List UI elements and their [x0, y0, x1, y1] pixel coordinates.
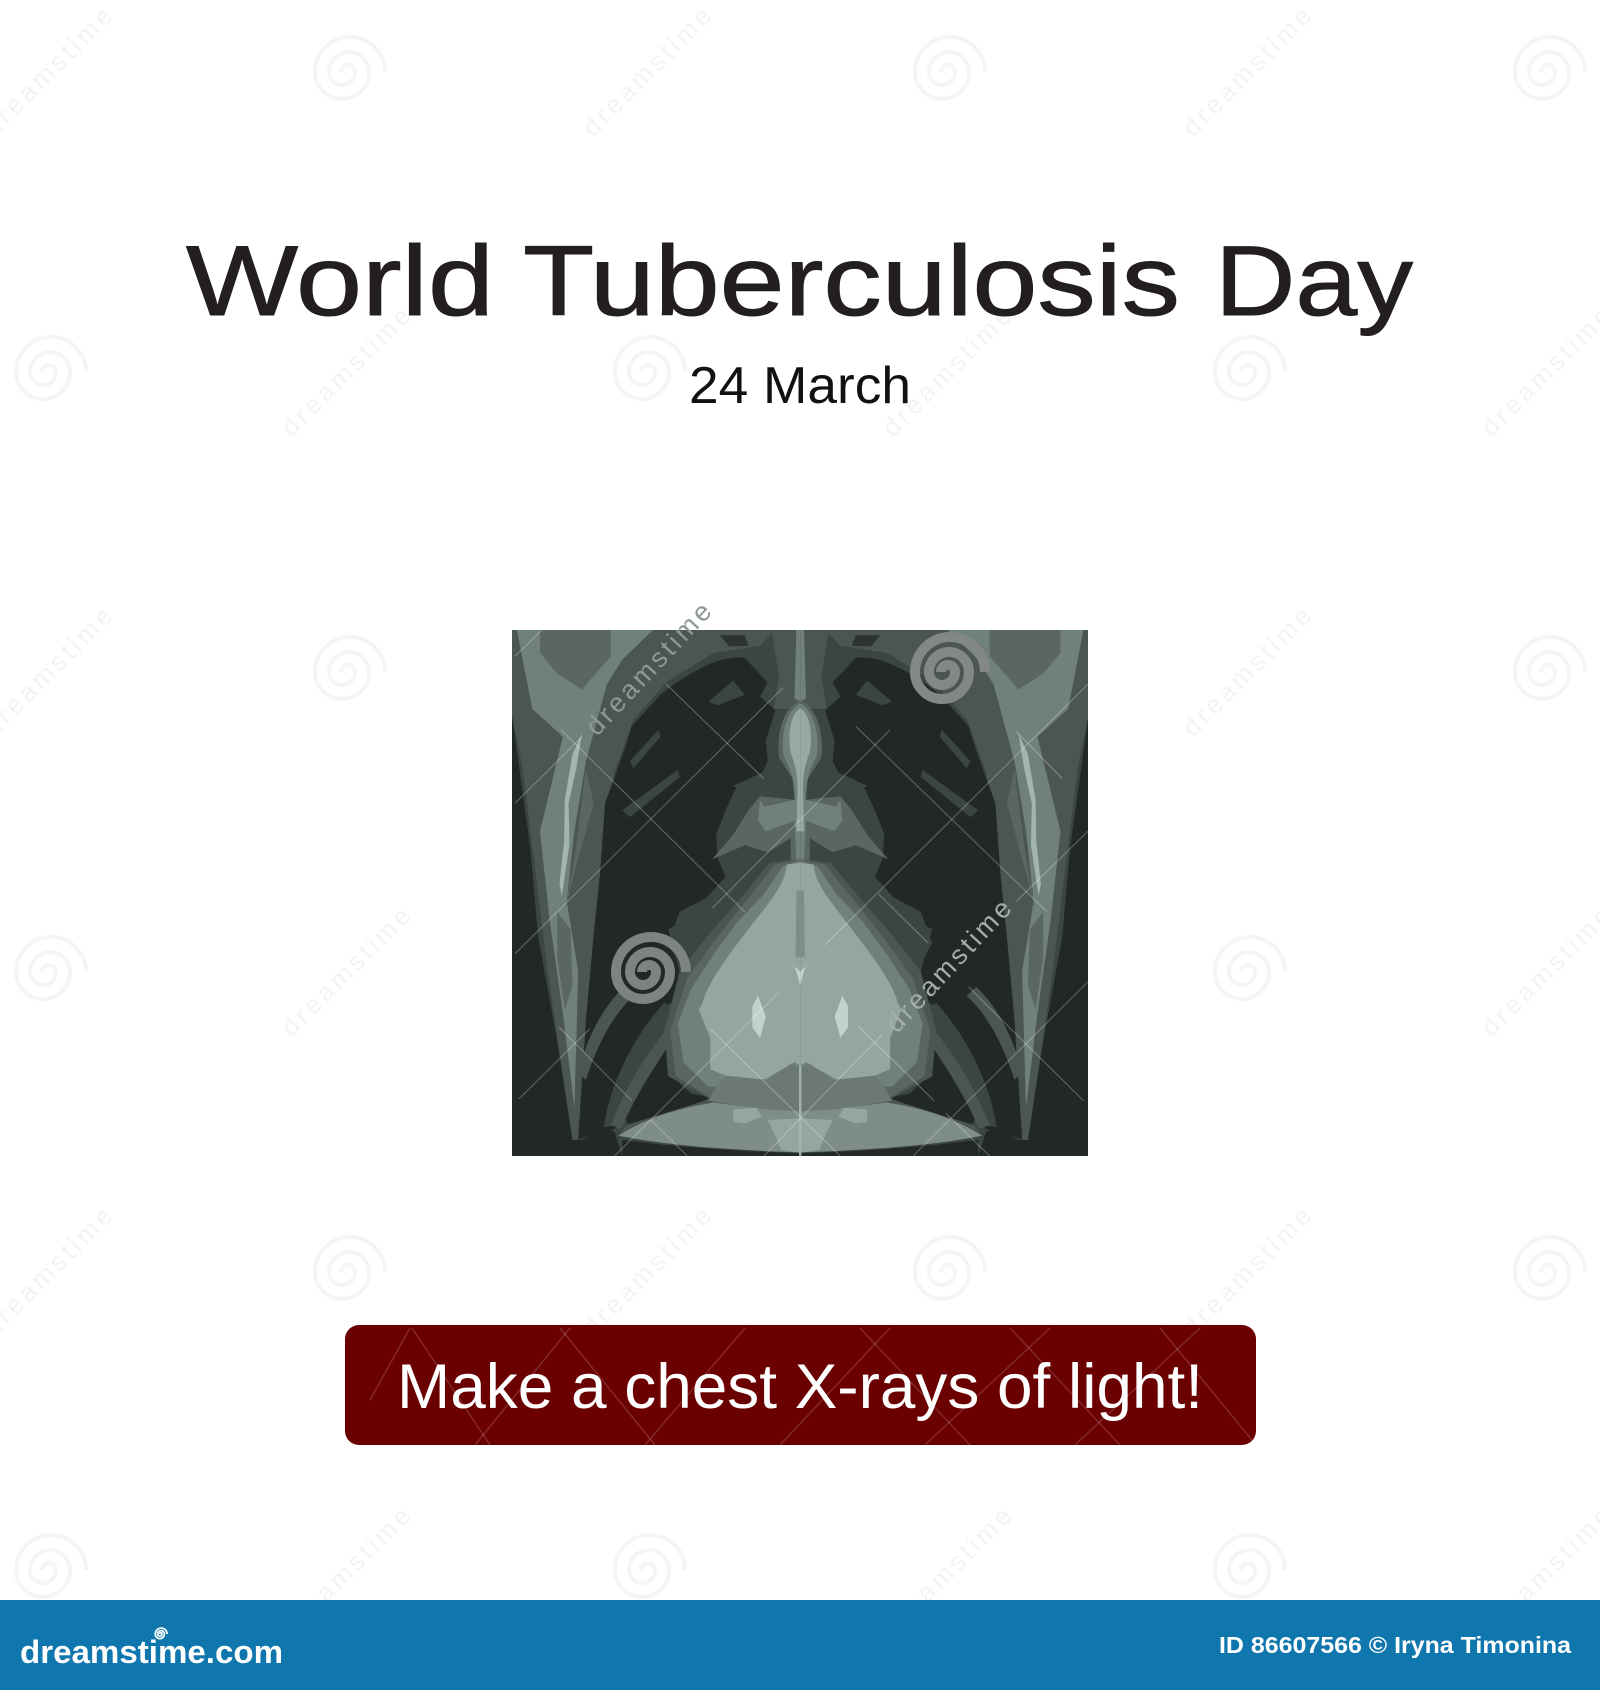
- watermark lines over x-ray: [515, 630, 1088, 1156]
- faint watermark pattern: dreamstime: [1176, 1, 1317, 142]
- faint watermark pattern: dreamstime: [275, 1501, 416, 1642]
- footer credit: ID 86607566 © Iryna Timonina: [1219, 1632, 1571, 1658]
- faint watermark pattern: dreamstime: [876, 1501, 1017, 1642]
- faint watermark pattern: dreamstime: [1176, 601, 1317, 742]
- faint watermark pattern: dreamstime: [876, 301, 1017, 442]
- x-ray watermark spiral right: [915, 637, 985, 699]
- x-ray watermark spiral left: [616, 937, 686, 999]
- footer bar: [0, 1600, 1600, 1690]
- faint watermark pattern: dreamstime: [275, 301, 416, 442]
- faint watermark pattern: dreamstime: [576, 1, 717, 142]
- x-ray watermark text upper: dreamstime: [579, 596, 717, 741]
- banner watermark lines: [370, 1328, 1256, 1445]
- footer logo text: dreamstime.com: [20, 1634, 283, 1670]
- title: Tuberculosis: [523, 225, 1180, 336]
- right half of chest: [800, 630, 1088, 1156]
- central vertical line: [799, 1066, 801, 1156]
- left half of chest: [512, 630, 800, 1156]
- faint watermark pattern: dreamstime: [1176, 1201, 1317, 1342]
- title: Day: [1215, 225, 1414, 336]
- date subtitle: 24 March: [689, 357, 911, 415]
- x-ray watermark text lower: dreamstime: [879, 893, 1017, 1038]
- title: [186, 225, 1414, 336]
- title: World: [186, 225, 494, 336]
- chest x-ray image: [512, 630, 1088, 1156]
- footer logo spiral: [155, 1628, 167, 1639]
- banner text: Make a chest X-rays of light!: [397, 1352, 1203, 1422]
- faint watermark pattern: dreamstime: [576, 1201, 717, 1342]
- call to action banner: [345, 1325, 1256, 1445]
- faint watermark pattern: dreamstime: [275, 901, 416, 1042]
